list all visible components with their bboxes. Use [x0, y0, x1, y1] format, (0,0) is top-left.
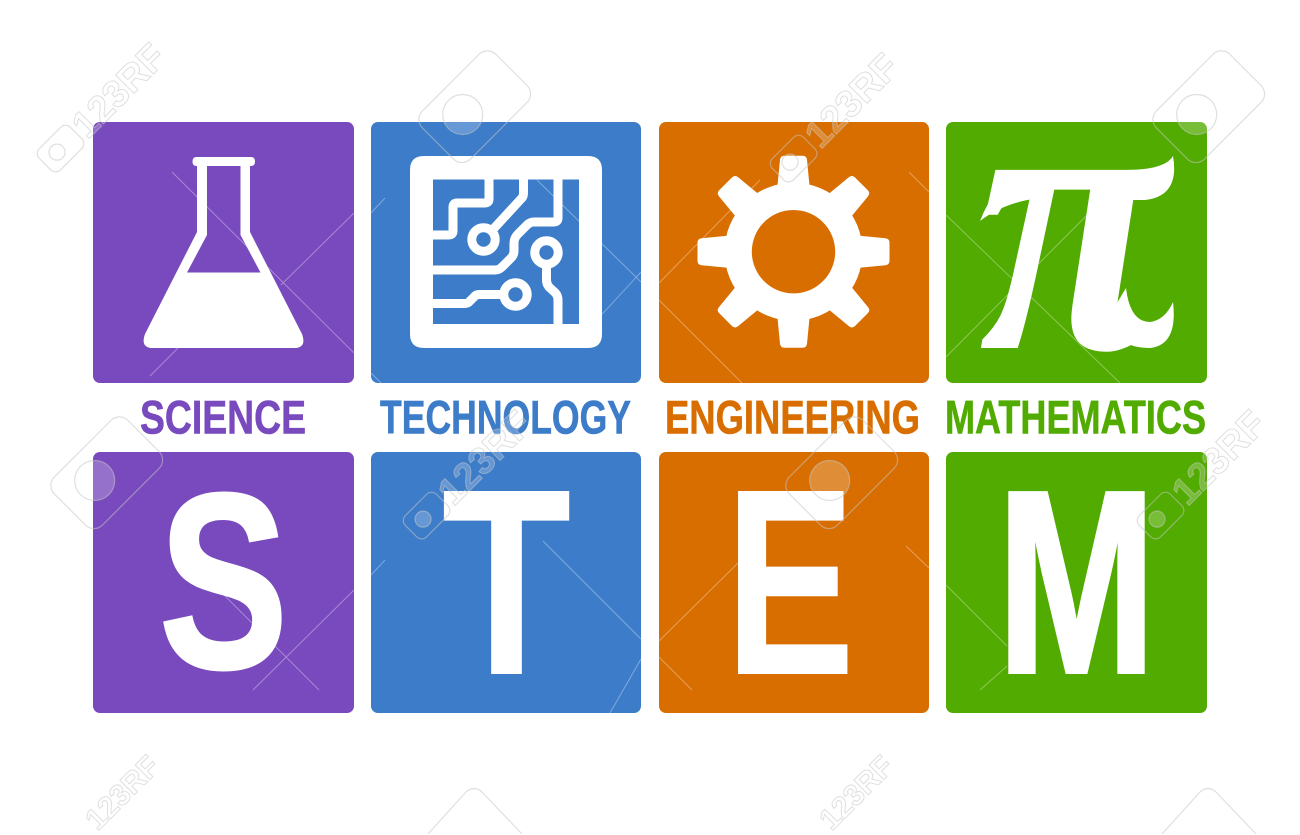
- label: engineering: ENGINEERING: [665, 392, 920, 444]
- panel: technology icon tile: [371, 122, 641, 383]
- label: science: SCIENCE: [140, 392, 306, 444]
- panel: letter E tile: [659, 434, 929, 731]
- label: technology: TECHNOLOGY: [380, 392, 631, 444]
- letter E: E: [725, 434, 855, 731]
- watermarks: 123RF stock logos: 123RF: [430, 403, 540, 513]
- panel: letter S tile: [93, 442, 354, 720]
- label: mathematics: MATHEMATICS: [945, 392, 1206, 444]
- letter T: T: [442, 434, 572, 731]
- watermarks: 123RF stock logos: 123RF: [813, 750, 900, 835]
- panel: letter M tile: [946, 438, 1207, 728]
- watermarks: 123RF stock logos: 123RF: [1164, 403, 1274, 513]
- watermarks: 123RF stock logos: 123RF: [79, 750, 166, 835]
- watermarks: 123RF stock logos: 123RF: [797, 46, 907, 156]
- icon: flask: [144, 157, 303, 348]
- panel: letter T tile: [371, 434, 641, 731]
- letter M: M: [997, 438, 1156, 728]
- icon: circuit board: [410, 156, 602, 348]
- watermarks: 123RF stock logos: 123RF: [64, 36, 174, 146]
- letter S: S: [159, 442, 288, 720]
- icon: pi symbol: π: [978, 2, 1174, 432]
- panel: mathematics icon tile: [946, 2, 1207, 432]
- panel: engineering icon tile: [659, 122, 929, 383]
- icon: gear: [698, 156, 890, 348]
- panel: science icon tile: [93, 122, 354, 383]
